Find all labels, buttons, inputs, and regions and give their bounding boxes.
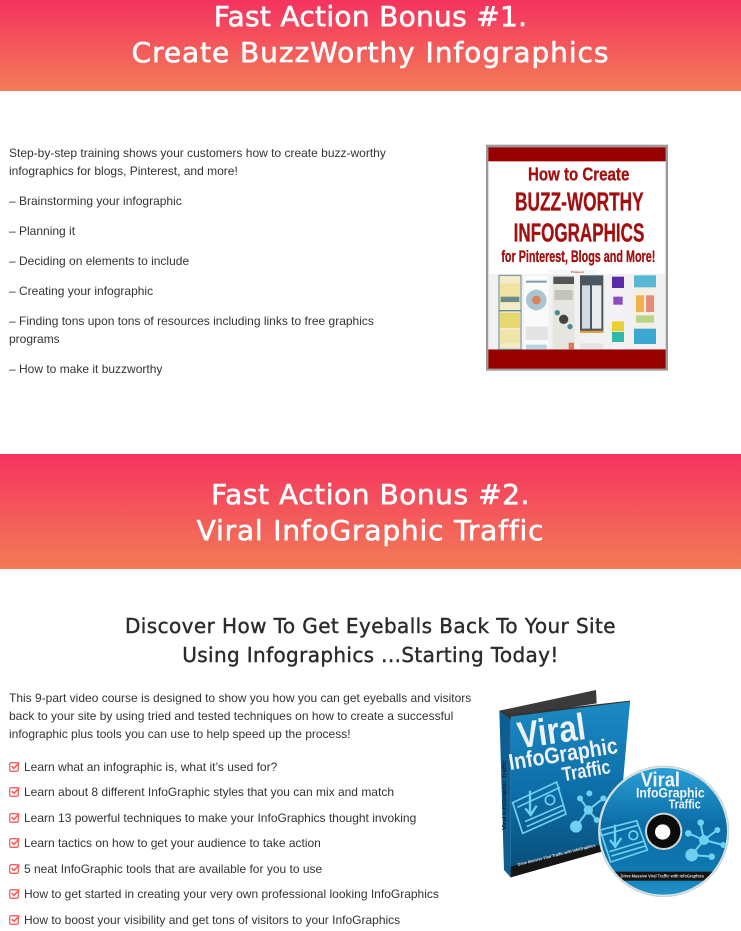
- thumbnail: infographic 3: [553, 275, 575, 349]
- checklist item 4: Learn tactics on how to get your audience to take action: [24, 836, 321, 850]
- image: book cover: How to Create: [528, 164, 629, 185]
- thumbnail: infographic 1: [499, 275, 521, 349]
- heading: bonus 1 title: Fast Action Bonus #1.: [214, 0, 527, 33]
- bullet: brainstorming: – Brainstorming your infographic: [9, 194, 182, 208]
- dvd case: Viral InfoGraphic Traffic: [502, 760, 508, 830]
- image: book cover: [486, 144, 668, 371]
- subheading: [125, 614, 616, 667]
- heading: bonus 2 title: Fast Action Bonus #2.: [211, 478, 530, 511]
- disc: [597, 766, 730, 897]
- thumbnail: infographic 6: [634, 275, 656, 344]
- text block: bonus 1 intro: [9, 146, 386, 178]
- checklist item 1: Learn what an infographic is, what it’s used for?: [24, 760, 277, 774]
- text block: course intro: infographic plus tools you can use to help speed up the process!: [9, 727, 351, 741]
- thumbnail: infographic 4: [580, 275, 603, 349]
- disc: Traffic: [669, 797, 701, 812]
- checklist item 7: How to boost your visibility and get tons of visitors to your InfoGraphics: [24, 913, 400, 927]
- text block: bonus 1 intro: Step-by-step training shows your customers how to create buzz-worthy: [9, 146, 386, 160]
- text block: bonus 1 intro: infographics for blogs, Pinterest, and more!: [9, 164, 238, 178]
- bullet: planning: – Planning it: [9, 224, 75, 238]
- heading: bonus 1 title: Create BuzzWorthy Infographics: [132, 36, 609, 69]
- disc: InfoGraphic: [636, 784, 705, 800]
- bullet: deciding: – Deciding on elements to include: [9, 254, 189, 268]
- dvd case: Drive Massive Viral Traffic with InfoGraphics: [517, 843, 596, 867]
- dvd case: [499, 690, 630, 877]
- bullet: finding resources: programs: [9, 332, 60, 346]
- checklist item 6: How to get started in creating your very own professional looking InfoGraphics: [24, 887, 439, 901]
- dvd case: InfoGraphic: [507, 732, 619, 775]
- heading: bonus 2 title: [196, 478, 544, 547]
- disc: Drive Massive Viral Traffic with InfoGraphics: [621, 874, 705, 879]
- text block: course intro: This 9-part video course is designed to show you how you can get eyeballs and visitors: [9, 691, 471, 705]
- checklist item 2: Learn about 8 different InfoGraphic styles that you can mix and match: [24, 785, 394, 799]
- bullet: buzzworthy: – How to make it buzzworthy: [9, 362, 162, 376]
- thumbnail: infographic 5: [611, 275, 625, 349]
- image: book cover: Pinterest: [571, 270, 584, 274]
- image: DVD case and disc: [499, 690, 730, 897]
- thumbnail: infographic 2: [524, 275, 549, 349]
- bullet: finding resources: – Finding tons upon tons of resources including links to free graphics: [9, 314, 374, 328]
- checklist item 3: Learn 13 powerful techniques to make your InfoGraphics thought invoking: [24, 811, 416, 825]
- disc: Viral: [641, 769, 680, 792]
- text block: course intro: [9, 691, 471, 741]
- subheading: Discover How To Get Eyeballs Back To Your Site: [125, 614, 616, 638]
- banner: bonus 1: [0, 0, 741, 91]
- heading: bonus 1 title: [132, 0, 609, 69]
- text block: course intro: back to your site by using tried and tested techniques on how to create a successful: [9, 709, 453, 723]
- heading: bonus 2 title: Viral InfoGraphic Traffic: [197, 514, 544, 547]
- dvd case: Viral: [515, 705, 588, 756]
- banner: bonus 2: [0, 454, 741, 569]
- bullet: finding resources: [9, 314, 374, 346]
- dvd case: Traffic: [560, 756, 612, 786]
- checklist item 5: 5 neat InfoGraphic tools that are available for you to use: [24, 862, 322, 876]
- bullet: creating: – Creating your infographic: [9, 284, 153, 298]
- subheading: Using Infographics ...Starting Today!: [182, 643, 559, 667]
